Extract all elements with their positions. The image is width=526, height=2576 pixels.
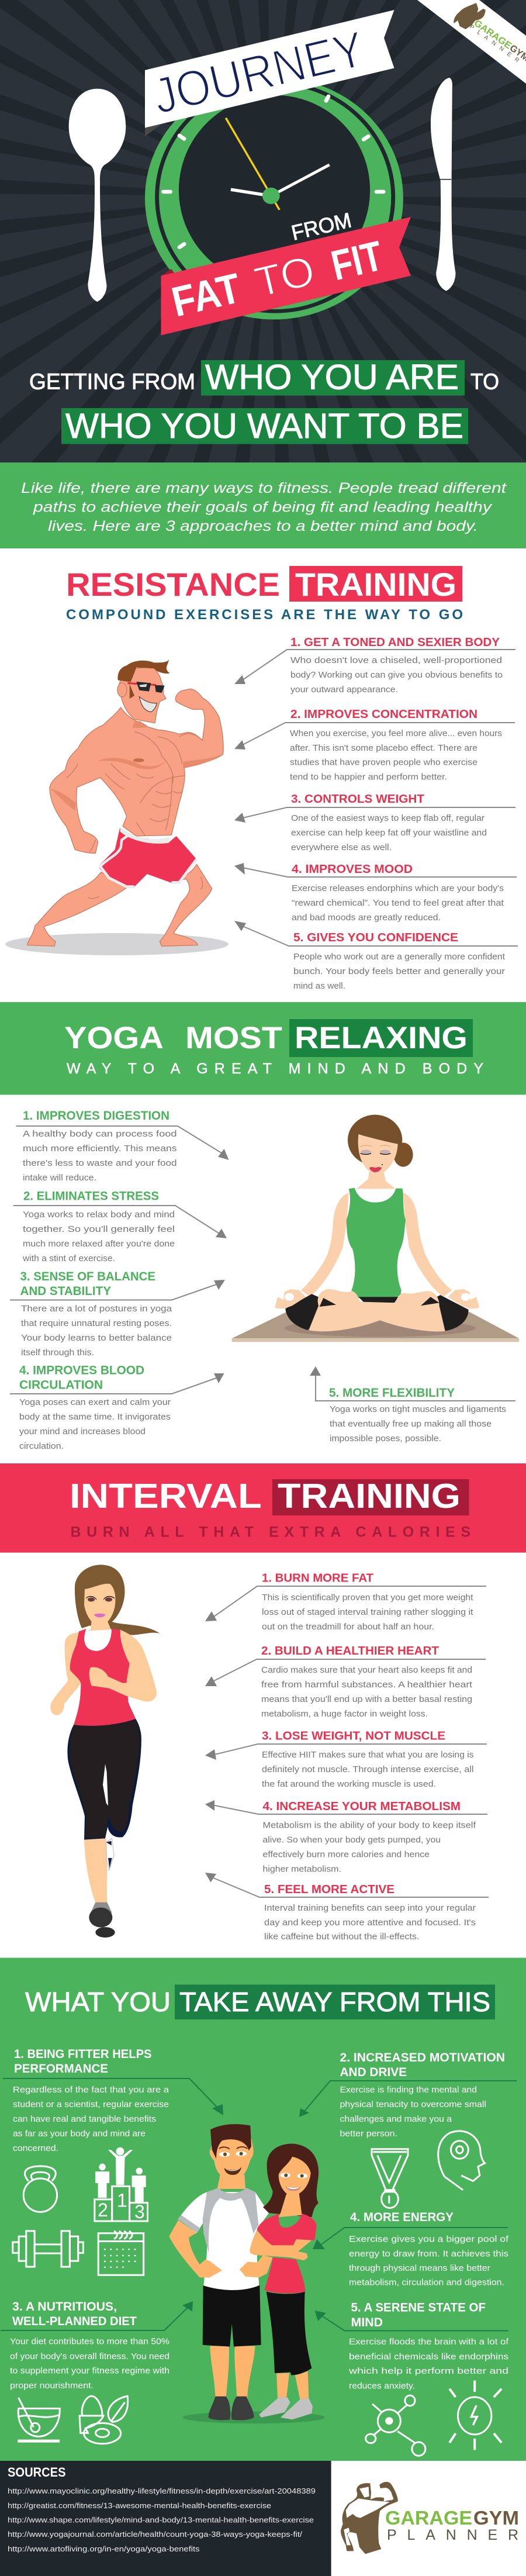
icon: knife [431,78,455,291]
item: sense of balance: itself through this. [21,1348,94,1358]
item: improves mood: and bad moods are greatly reduced. [292,913,441,923]
item: lose weight not muscle: definitely not muscle. Through intense exercise, all [262,1764,473,1774]
icon: egg and avocado [79,2396,128,2444]
item: serene state of mind [314,2301,509,2391]
item: lose weight not muscle [205,1729,487,1789]
panel: yoga header: RELAXING [295,1021,468,1055]
item: more energy [313,2211,509,2287]
item: build a healthier heart [205,1644,486,1719]
heading: what you take away from this [25,1984,495,2019]
item: more energy: metabolism, circulation and digestion. [349,2278,504,2287]
item: serene state of mind: which help it perform better and [348,2366,508,2376]
item: increased motivation and drive: better person. [340,2129,397,2139]
item: nutritious diet [1,2300,193,2391]
panel: intro band: paths to achieve their goals of being fit and leading healthy [33,499,493,516]
item: lose weight not muscle: the fat around the working muscle is used. [262,1779,436,1789]
item: nutritious diet: Your diet contributes to more than 50% [10,2337,169,2347]
panel: intro band: Like life, there are many ways to fitness. People tread different [21,480,507,496]
item: improves blood circulation: circulation. [19,1441,64,1451]
icon: brain with energy bolt [449,2381,501,2450]
item: build a healthier heart: means that you'll end up with a better basal resting [261,1694,472,1704]
item: sense of balance: that require unnatural resting poses. [21,1318,172,1328]
logo: garage gym planner [341,2482,519,2554]
figure: yoga woman on mat [232,1115,519,1342]
item: feel more active: day and keep you more attentive and focused. It's [264,1918,476,1928]
panel: sources: http://www.yogajournal.com/article/health/count-yoga-38-ways-yoga-keeps-fit/ [8,2530,303,2539]
item: increased motivation and drive [299,2051,517,2139]
panel: yoga header [0,1002,526,1094]
heading: who you want to be: WHO YOU WANT TO BE [65,406,463,446]
item: build a healthier heart: free from harmful substances. A healthier heart [261,1680,473,1690]
panel: sources: http://greatist.com/fitness/13-awesome-mental-health-benefits-exercise [8,2502,271,2510]
item: more flexibility: that eventually free up making all those [330,1419,492,1429]
item: feel more active: Interval training benefits can seep into your regular [264,1903,476,1913]
item: increased motivation and drive: physical tenacity to overcome small [340,2100,486,2109]
item: improves concentration: after. This isn't some placebo effect. There are [290,743,477,753]
icon: podium: 3 [134,2201,145,2222]
panel: yoga header: WAY TO A GREAT MIND AND BODY [67,1061,483,1077]
item: get a toned and sexier body [234,636,515,695]
man: red shorts [99,827,197,887]
item: lose weight not muscle: Effective HIIT makes sure that what you are losing is [262,1750,473,1760]
logo: corner ribbon: PLANNER [468,24,520,64]
banner: fat to fit ribbon: FAT [167,265,245,326]
item: controls weight: 3. CONTROLS WEIGHT [291,792,424,806]
item: improves digestion: intake will reduce. [23,1173,96,1183]
item: improves blood circulation: CIRCULATION [19,1379,103,1391]
item: improves digestion: much more efficiently. This means [23,1144,177,1154]
item: increase your metabolism: alive. So when your body gets pumped, you [263,1835,441,1845]
panel: hero header [0,0,526,490]
item: increase your metabolism: higher metabolism. [263,1864,341,1874]
item: increased motivation and drive: AND DRIVE [340,2066,407,2079]
item: burn more fat: This is scientifically proven that you get more weight [262,1593,473,1603]
item: being fitter helps performance: 1. BEING FITTER HELPS [14,2047,152,2061]
icon: podium: 2 [98,2199,108,2221]
item: more flexibility: 5. MORE FLEXIBILITY [329,1386,455,1400]
item: feel more active [205,1873,489,1942]
item: serene state of mind: beneficial chemicals like endorphins [349,2351,508,2362]
item: improves concentration: 2. IMPROVES CONCENTRATION [290,707,477,721]
item: sense of balance: AND STABILITY [20,1284,111,1298]
item: nutritious diet: 3. A NUTRITIOUS, [12,2300,117,2313]
item: improves blood circulation: your mind and increases blood [19,1427,146,1437]
item: increased motivation and drive: Exercise is finding the mental and [340,2085,477,2095]
item: eliminates stress: much more relaxed after you're done [23,1239,175,1249]
item: increased motivation and drive: challenges and make you a [340,2114,452,2124]
text: from: FROM [289,208,354,245]
item: get a toned and sexier body: 1. GET A TONED AND SEXIER BODY [290,636,500,649]
item: increase your metabolism [205,1800,487,1874]
panel: sources [0,2461,331,2576]
heading: resistance training [66,566,462,603]
item: nutritious diet: WELL-PLANNED DIET [12,2315,137,2328]
item: get a toned and sexier body: body? Working out can give you obvious benefits to [290,670,503,680]
item: more energy: Exercise gives you a bigger pool of [349,2235,509,2244]
icon: calendar [98,2231,144,2275]
item: controls weight: exercise can help keep fat off your waistline and [291,828,487,838]
item: improves mood: Exercise releases endorphins which are your body's [292,883,504,893]
figure: couple [169,2124,325,2423]
heading: getting from who you are to: WHO YOU ARE [205,358,459,397]
item: being fitter helps performance: PERFORMANCE [14,2062,108,2076]
item: burn more fat: 1. BURN MORE FAT [262,1572,373,1585]
item: burn more fat [205,1572,486,1632]
item: burn more fat: out on the treadmill for about half an hour. [262,1622,434,1632]
item: being fitter helps performance: can have real and tangible benefits [13,2114,156,2124]
item: improves concentration: tend to be happier and perform better. [290,772,447,782]
item: increased motivation and drive: 2. INCREASED MOTIVATION [340,2051,505,2064]
item: being fitter helps performance: Regardless of the fact that you are a [13,2085,169,2095]
item: burn more fat: loss out of staged interval training rather slogging it [262,1607,473,1617]
item: eliminates stress: 2. ELIMINATES STRESS [23,1189,159,1203]
icon: clock [145,77,403,319]
item: serene state of mind: MIND [351,2316,383,2329]
heading: getting from who you are to [29,358,499,397]
item: serene state of mind: Exercise floods the brain with a lot of [349,2337,509,2347]
item: gives you confidence [234,921,518,991]
icon: head with gear [438,2131,485,2190]
heading: resistance training: RESISTANCE [66,566,280,603]
item: being fitter helps performance: student or a scientist, regular exercise [13,2100,169,2109]
item: being fitter helps performance [3,2047,223,2153]
item: eliminates stress: with a stint of exercise. [22,1254,115,1263]
figure: running woman [50,1565,160,1938]
banner: fat to fit ribbon: TO [250,247,319,306]
heading: getting from who you are to: TO [470,370,499,395]
item: improves concentration: studies that have proven people who exercise [290,758,477,767]
item: build a healthier heart: Cardio makes sure that your heart also keeps fit and [261,1665,472,1675]
logo: corner ribbon: GARAGE [472,18,513,51]
heading: getting from who you are to: GETTING FROM [29,370,195,395]
item: lose weight not muscle: 3. LOSE WEIGHT, NOT MUSCLE [262,1729,445,1742]
icon: soup bowl [18,2398,60,2441]
list: interval benefits [205,1572,489,1942]
item: improves blood circulation: body at the same time. It invigorates [19,1412,171,1422]
item: sense of balance: 3. SENSE OF BALANCE [20,1270,155,1283]
panel: takeaway section [0,1958,526,2461]
list: yoga benefits [10,1109,515,1451]
item: improves concentration [234,707,515,782]
item: sense of balance [10,1270,225,1358]
panel: intro band [0,462,526,548]
item: improves mood: “reward chemical”. You tend to feel great after that [292,898,504,908]
panel: sources: SOURCES [8,2465,65,2480]
item: serene state of mind: 5. A SERENE STATE OF [351,2301,486,2314]
panel: intro band: lives. Here are 3 approaches to a better mind and body. [48,518,478,534]
icon: podium: 1 [117,2190,127,2211]
item: improves digestion: 1. IMPROVES DIGESTION [23,1109,169,1123]
logo: garage gym planner: GARAGE [385,2507,472,2529]
item: sense of balance: Your body learns to better balance [21,1333,172,1343]
item: more flexibility [310,1366,515,1444]
icon: molecule network [366,2395,425,2456]
item: more energy: 4. MORE ENERGY [350,2211,454,2224]
logo: garage gym planner: GYM [473,2507,519,2529]
panel: interval header: TRAINING [278,1477,461,1515]
item: more energy: energy to draw from. It achieves this [349,2249,508,2259]
icon: medal [372,2149,408,2208]
icon: podium [95,2147,148,2222]
item: controls weight [234,792,515,852]
item: feel more active: like caffeine but without the ill-effects. [264,1932,420,1942]
item: improves blood circulation: Yoga poses can exert and calm your [19,1397,171,1407]
item: nutritious diet: to supplement your fitness regime with [10,2366,169,2376]
panel: sources: http://www.mayoclinic.org/healthy-lifestyle/fitness/in-depth/exercise/art-20048389 [8,2487,316,2495]
icon: kettlebell [23,2166,57,2212]
item: gives you confidence: People who work out are a generally more confident [293,952,506,962]
item: get a toned and sexier body: Who doesn't love a chiseled, well-proportioned [290,655,502,665]
subtitle: compound exercises: COMPOUND EXERCISES ARE THE WAY TO GO [66,607,463,623]
item: gives you confidence: mind as well. [293,981,345,991]
item: improves digestion [16,1109,229,1183]
item: increase your metabolism: Metabolism is the ability of your body to keep itself [263,1821,476,1830]
panel: yoga header: YOGA [64,1021,164,1055]
item: sense of balance: There are a lot of postures in yoga [21,1304,172,1314]
man: head and glasses [117,659,170,723]
item: improves mood: 4. IMPROVES MOOD [292,862,413,876]
heading: what you take away from this: TAKE AWAY FROM THIS [179,1987,490,2017]
item: gives you confidence: 5. GIVES YOU CONFIDENCE [293,931,458,944]
item: eliminates stress [13,1189,227,1263]
item: build a healthier heart: metabolism, a huge factor in weight loss. [261,1709,428,1719]
item: improves digestion: there's less to waste and your food [23,1158,177,1168]
logo: bodybuilder mark [341,2482,398,2554]
banner: journey ribbon: JOURNEY [148,21,370,125]
icon: dumbbell [13,2231,83,2267]
item: get a toned and sexier body: your outward appearance. [290,685,398,695]
item: build a healthier heart: 2. BUILD A HEALTHIER HEART [261,1644,439,1658]
figure: muscular man [5,659,229,955]
item: increase your metabolism: effectively burn more calories and hence [263,1850,430,1859]
item: being fitter helps performance: as far as your body and mind are [13,2129,146,2139]
panel: sources: http://www.shape.com/lifestyle/mind-and-body/13-mental-health-benefits-exercise [8,2516,314,2525]
item: serene state of mind: reduces anxiety. [349,2381,415,2391]
item: more flexibility: Yoga works on tight muscles and ligaments [330,1404,506,1414]
item: improves blood circulation: 4. IMPROVES BLOOD [19,1363,144,1377]
item: feel more active: 5. FEEL MORE ACTIVE [264,1883,394,1896]
item: eliminates stress: together. So you'll generally feel [23,1224,175,1234]
banner: fat to fit ribbon: FIT [327,233,387,289]
item: improves concentration: When you exercise, you feel more alive... even hours [290,728,502,738]
item: nutritious diet: of your body's overall fitness. You need [10,2351,169,2361]
panel: interval header [0,1463,526,1553]
panel: sources: http://www.artofliving.org/in-en/yoga/yoga-benefits [8,2545,200,2553]
logo: corner ribbon [417,0,526,84]
panel: yoga header: MOST [185,1021,282,1055]
item: being fitter helps performance: concerned. [13,2143,58,2153]
panel: interval header: BURN ALL THAT EXTRA CALORIES [70,1524,470,1541]
list: resistance training benefits [234,636,518,991]
item: more energy: through physical means like better [349,2263,490,2273]
panel: interval header: INTERVAL [70,1477,262,1515]
item: nutritious diet: proper nourishment. [10,2381,94,2391]
item: controls weight: everywhere else as well. [291,842,392,852]
item: improves mood [234,862,517,923]
item: more flexibility: impossible poses, possible. [330,1434,441,1444]
item: increase your metabolism: 4. INCREASE YOUR METABOLISM [263,1800,461,1813]
icon: spoon [69,89,126,302]
logo: garage gym planner: PLANNER [387,2527,518,2543]
item: gives you confidence: bunch. Your body feels better and generally your [293,966,505,976]
item: eliminates stress: Yoga works to relax body and mind [23,1210,175,1220]
item: improves blood circulation [10,1363,224,1451]
banner: fat to fit ribbon [161,217,411,336]
heading: resistance training: TRAINING [295,566,456,603]
item: controls weight: One of the easiest ways to keep flab off, regular [291,813,485,823]
heading: what you take away from this: WHAT YOU [25,1987,171,2017]
item: improves digestion: A healthy body can process food [23,1129,177,1139]
